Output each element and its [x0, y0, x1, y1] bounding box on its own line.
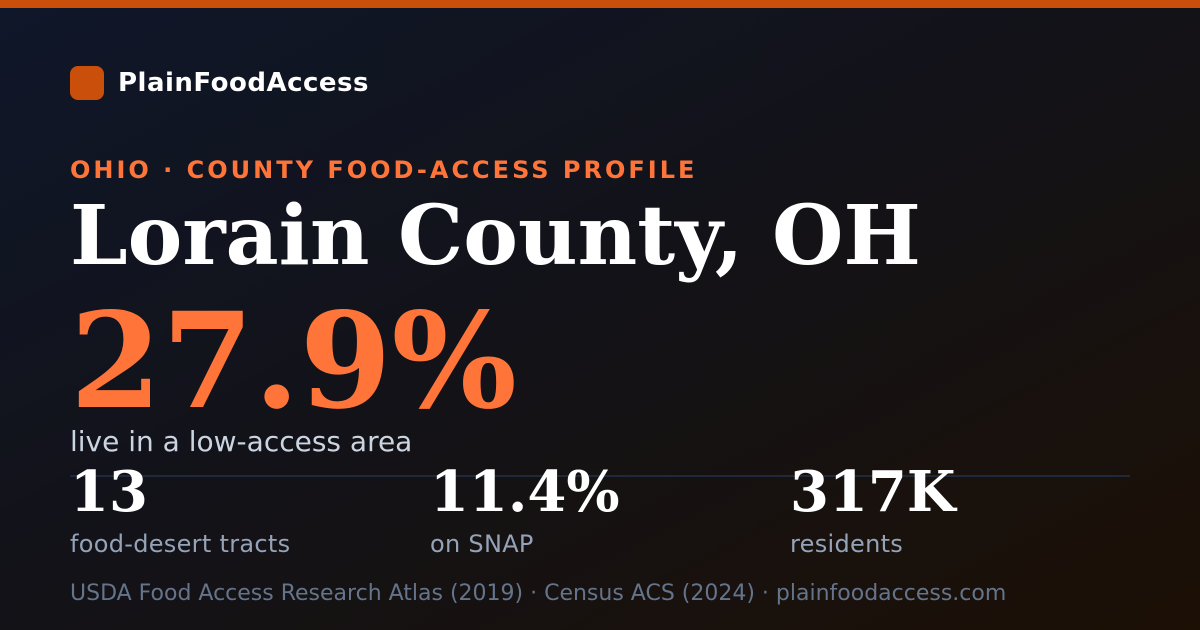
source footer: USDA Food Access Research Atlas (2019) · Census ACS (2024) · plainfoodaccess.com — [70, 581, 1006, 606]
label: residents — [790, 530, 903, 558]
statistic caption: live in a low-access area — [70, 425, 412, 458]
eyebrow: OHIO · COUNTY FOOD-ACCESS PROFILE — [70, 156, 697, 184]
stat: food-desert tracts — [70, 459, 290, 558]
value: 317K — [790, 459, 956, 525]
top accent bar — [0, 0, 1200, 8]
value: 13 — [70, 459, 148, 525]
title: Lorain County, OH — [70, 188, 921, 284]
main statistic: 27.9% — [70, 284, 517, 439]
label: food-desert tracts — [70, 530, 290, 558]
stat: on SNAP — [430, 459, 620, 558]
value: 11.4% — [430, 459, 620, 525]
brand — [70, 66, 369, 100]
brand name: PlainFoodAccess — [118, 68, 369, 98]
icon: brand logo square — [70, 66, 104, 100]
label: on SNAP — [430, 530, 534, 558]
stat: residents — [790, 459, 958, 558]
